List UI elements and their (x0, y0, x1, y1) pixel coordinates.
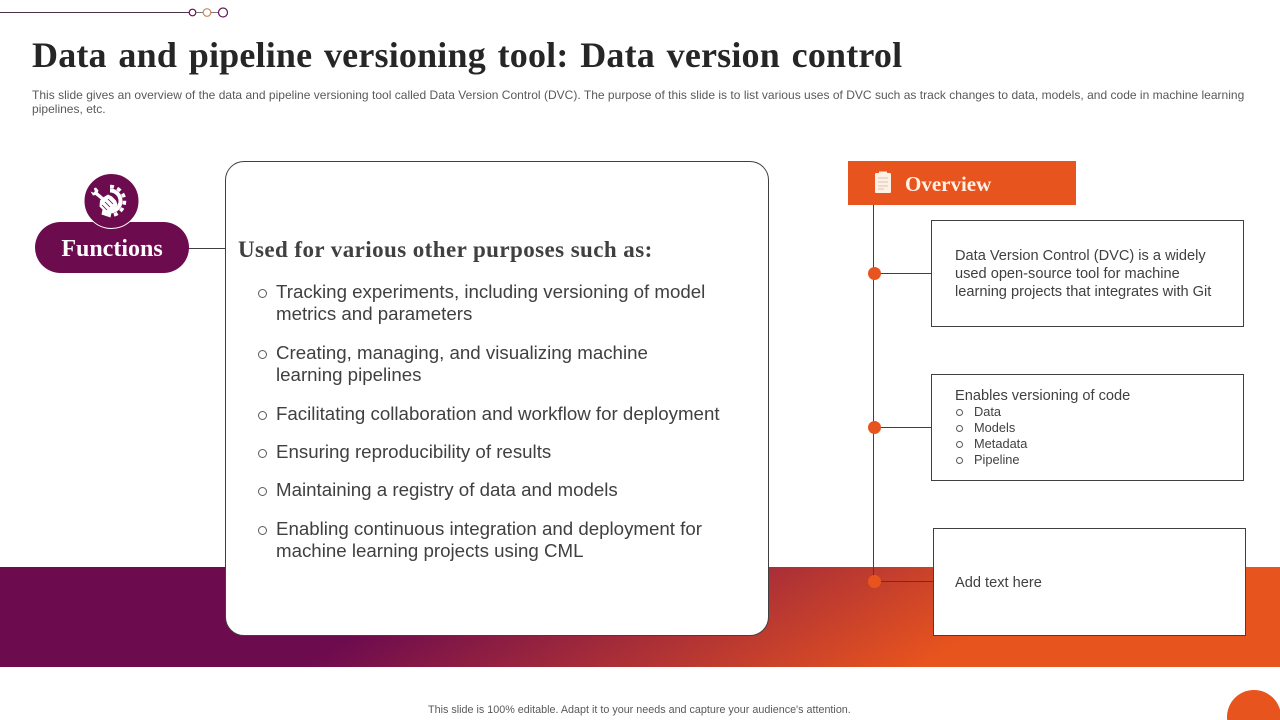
list item 1 (276, 281, 746, 325)
list item 6 (276, 518, 746, 562)
functions pill (35, 222, 189, 273)
description: This slide gives an overview of the data and pipeline versioning tool called Data Version Control (DVC). The purpose of this slide is to list various uses of DVC such as track changes to data, models, and code in machine learning (32, 88, 1244, 102)
overview box 3 (933, 528, 1246, 636)
sub item: models: Models (974, 420, 1015, 435)
panel heading: Used for various other purposes such as: (238, 237, 653, 262)
connector 1 (874, 273, 932, 274)
icon: clipboard (875, 172, 891, 193)
gradient band (0, 567, 1280, 667)
footer note: This slide is 100% editable. Adapt it to your needs and capture your audience's attention. (428, 704, 851, 716)
overview box 1 text (955, 248, 1212, 300)
list item 3: Facilitating collaboration and workflow for deployment (276, 403, 720, 424)
overview box 1 (931, 220, 1244, 327)
list item 1: Tracking experiments, including versioning of model (276, 281, 705, 302)
overview box 3 text: Add text here (955, 575, 1042, 591)
overview timeline line (873, 205, 874, 581)
connector 3 (874, 581, 934, 582)
overview box 1 text: learning projects that integrates with Git (955, 284, 1211, 300)
overview box 2 (931, 374, 1244, 481)
sub item: metadata: Metadata (974, 436, 1027, 451)
corner circle (1227, 690, 1280, 720)
overview header (848, 161, 1076, 205)
overview box 1 text: Data Version Control (DVC) is a widely (955, 248, 1206, 264)
timeline dot 3 (868, 575, 881, 588)
list item 6: machine learning projects using CML (276, 540, 583, 561)
functions connector (186, 248, 226, 249)
sub item: data: Data (974, 404, 1001, 419)
connector 2 (874, 427, 932, 428)
list item 2: learning pipelines (276, 364, 421, 385)
functions pill: Functions (61, 236, 163, 262)
decoration: top line with circles (0, 7, 228, 18)
title: Data and pipeline versioning tool: Data version control (32, 35, 902, 75)
overview heading: Overview (905, 172, 991, 196)
overview box 1 text: used open-source tool for machine (955, 266, 1180, 282)
description: pipelines, etc. (32, 102, 106, 116)
timeline dot 1 (868, 267, 881, 280)
list item 4: Ensuring reproducibility of results (276, 441, 551, 462)
timeline dot 2 (868, 421, 881, 434)
functions badge (35, 174, 189, 273)
overview box 2 heading: Enables versioning of code (955, 388, 1130, 404)
list item 5: Maintaining a registry of data and models (276, 479, 618, 500)
list item 6: Enabling continuous integration and deployment for (276, 518, 702, 539)
panel: functions list (225, 161, 769, 636)
list item 2: Creating, managing, and visualizing machine (276, 342, 648, 363)
description (32, 88, 1244, 116)
list item 2 (276, 342, 746, 386)
icon: wrench, fist and gear (84, 174, 138, 229)
list item 1: metrics and parameters (276, 303, 472, 324)
sub item: pipeline: Pipeline (974, 452, 1020, 467)
